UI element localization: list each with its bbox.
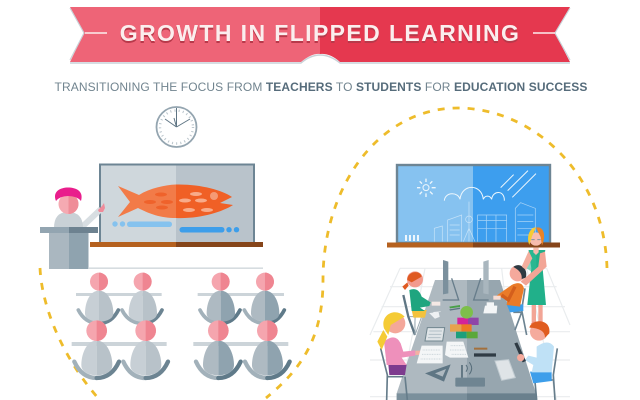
hair (55, 188, 82, 201)
student: pink shirt (377, 312, 424, 400)
banner left half (70, 7, 320, 62)
ledge (90, 242, 176, 247)
head (58, 194, 78, 214)
student front row 3 (196, 320, 241, 378)
board text bars (112, 221, 239, 232)
set square (425, 364, 451, 382)
clock (156, 107, 196, 147)
podium (49, 232, 69, 269)
title: GROWTH IN FLIPPED LEARNING (120, 20, 520, 46)
monitors (443, 260, 489, 300)
papers (417, 302, 497, 363)
banner (70, 7, 570, 63)
subtitle: TRANSITIONING THE FOCUS FROM TEACHERS TO STUDENTS FOR EDUCATION SUCCESS (55, 80, 587, 94)
glasses (430, 312, 441, 318)
student front row 2 (123, 320, 168, 378)
rain (501, 171, 536, 197)
skyline (434, 202, 535, 242)
router (455, 362, 485, 387)
fish (118, 184, 233, 218)
student back row 4 (244, 273, 284, 323)
student back row 3 (200, 273, 240, 323)
student: light blue shirt (514, 321, 557, 400)
dashed path (40, 108, 607, 398)
notebook (495, 360, 515, 380)
student: orange shirt (493, 265, 527, 335)
student back row 1 (78, 273, 118, 323)
students (72, 273, 290, 378)
classroom (377, 227, 557, 400)
clouds (444, 187, 504, 201)
small figures (406, 235, 418, 241)
student back row 2 (122, 273, 162, 323)
student front row 4 (245, 320, 290, 378)
student: green shirt (402, 271, 440, 335)
desks (72, 293, 288, 346)
tablet (425, 328, 445, 341)
floor grid (370, 268, 570, 400)
chalk drawing: sun, clouds, rain and skyline (406, 171, 536, 242)
books and apple (450, 306, 479, 338)
items on table (417, 302, 515, 387)
arm (82, 209, 101, 227)
table (397, 280, 536, 400)
right chalkboard (387, 164, 560, 248)
student front row 1 (74, 320, 119, 378)
pens (474, 348, 487, 350)
body (54, 212, 83, 228)
sun (417, 179, 436, 197)
left chalkboard (90, 164, 263, 247)
ledge (387, 242, 474, 248)
teacher (40, 188, 105, 269)
banner right half (320, 7, 570, 62)
teacher standing (521, 227, 547, 324)
